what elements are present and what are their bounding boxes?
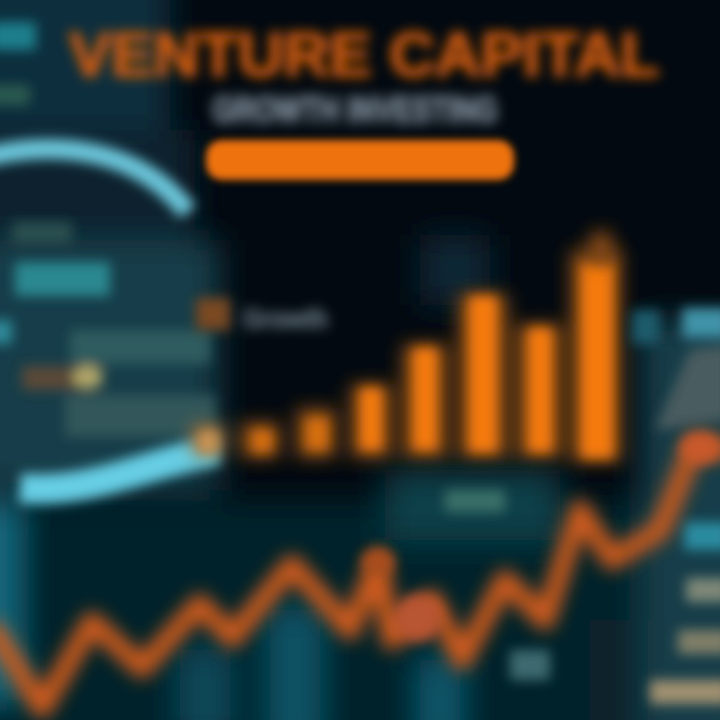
top tick of tallest bar [590,232,612,264]
orange line chart [0,445,720,708]
legend label [196,298,328,334]
bars [200,264,613,458]
cyan swoosh upper [0,149,188,212]
bar halos [192,250,622,462]
orange banner [206,140,514,180]
left tower details [0,22,215,437]
bar chart [192,232,622,462]
right side list rows [650,522,720,704]
cyan swoosh lower [20,450,218,489]
legend label: Growth [243,303,328,334]
right side city [632,308,720,430]
central caption [445,490,505,512]
subtitle: GROWTH INVESTING [212,89,498,130]
line chart highlight blobs [362,432,720,680]
title: VENTURE CAPITAL [69,21,659,90]
